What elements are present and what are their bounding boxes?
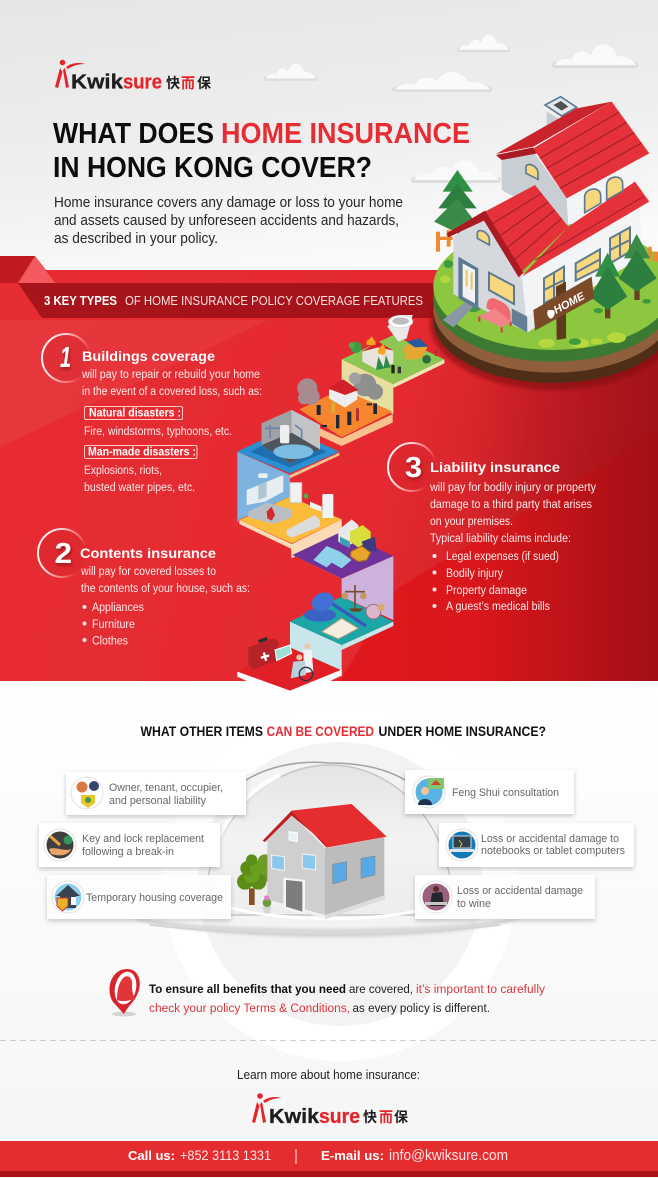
callout text <box>149 982 546 1015</box>
footer logo: sure <box>319 1106 360 1128</box>
card: feng shui <box>405 770 574 814</box>
icon: bell location pin <box>109 969 140 1016</box>
card: wine: to wine <box>457 898 491 910</box>
learn more text: Learn more about home insurance: <box>237 1068 420 1082</box>
footer contact bar <box>0 1141 658 1177</box>
badge 2 <box>38 529 86 577</box>
step: legal scene <box>290 585 393 677</box>
callout text: check your policy Terms & Conditions, <box>149 1001 350 1015</box>
icon: people with shield <box>71 777 103 809</box>
body text 3: on your premises. <box>430 516 513 528</box>
title <box>53 118 470 184</box>
card: key and lock: following a break-in <box>82 846 174 858</box>
step: home contents room <box>239 473 342 558</box>
footer logo: 快 <box>363 1109 377 1125</box>
lower walls <box>453 205 642 333</box>
icon: key in hand <box>44 829 76 861</box>
card: wine: Loss or accidental damage <box>457 885 583 897</box>
island shadow <box>430 257 658 390</box>
section 1: buildings coverage <box>42 334 262 494</box>
body text 2: Furniture <box>92 619 135 631</box>
dome floor <box>126 917 525 938</box>
body text 1: in the event of a covered loss, such as: <box>82 386 262 398</box>
card: notebooks and tablets: Loss or accidental damage to <box>481 833 619 845</box>
icon: house with shield <box>52 881 84 913</box>
island base <box>433 223 658 383</box>
sign: home: HOME <box>552 290 587 317</box>
callout text: as every policy is different. <box>352 1001 490 1015</box>
illustration: isometric house on island <box>430 97 658 390</box>
ribbon heading: OF HOME INSURANCE POLICY COVERAGE FEATURES <box>125 294 423 308</box>
step: natural disaster scene <box>342 315 444 414</box>
small house illustration <box>237 804 387 919</box>
callout text: are covered, <box>349 982 413 996</box>
logo: Kwiksure: Kwik <box>71 72 124 94</box>
tree: back right <box>619 234 657 300</box>
body text 2: will pay for covered losses to <box>80 566 216 578</box>
chimney <box>545 97 577 132</box>
isometric staircase illustration <box>237 315 444 701</box>
badge 3: 3 <box>405 452 422 484</box>
ribbon heading: 3 KEY TYPES <box>44 294 117 308</box>
step: medical scene <box>237 637 342 701</box>
card: feng shui: Feng Shui consultation <box>452 787 559 799</box>
body text 1: busted water pipes, etc. <box>84 482 195 494</box>
badge 1 <box>42 334 90 382</box>
clouds <box>264 35 638 183</box>
door <box>458 257 478 310</box>
logo: Kwiksure: 快 <box>166 75 180 91</box>
panel: red coverage band <box>0 256 658 681</box>
step: man-made disaster scene <box>297 372 393 446</box>
upper roof <box>496 102 649 198</box>
logo: Kwiksure <box>55 60 211 94</box>
flower pot <box>262 895 272 913</box>
wall windows <box>489 227 630 304</box>
footer contact bar: info@kwiksure.com <box>389 1148 508 1164</box>
body text 2: Appliances <box>92 602 144 614</box>
card: temporary housing: Temporary housing coverage <box>86 892 223 904</box>
callout text: it’s important to carefully <box>416 982 546 996</box>
card: key and lock <box>39 823 220 867</box>
fences <box>436 230 658 262</box>
card: wine <box>415 875 595 919</box>
card: key and lock: Key and lock replacement <box>82 833 204 845</box>
ribbon heading <box>18 283 450 318</box>
body text 1 <box>81 369 262 494</box>
tree behind house <box>237 854 277 905</box>
section heading: other items: CAN BE COVERED <box>266 724 374 739</box>
body text 1: Explosions, riots, <box>84 465 162 477</box>
body text 3: Bodily injury <box>446 568 503 580</box>
tag: natural disasters: Natural disasters : <box>89 408 181 420</box>
footer logo: Kwik <box>269 1106 320 1128</box>
footer logo: 而 <box>379 1109 393 1125</box>
step: clothing and belongings <box>290 519 393 620</box>
title: WHAT DOES <box>53 118 214 150</box>
heading 2: Contents insurance <box>80 545 216 561</box>
logo: Kwiksure: 保 <box>197 75 211 91</box>
footer logo <box>252 1093 408 1128</box>
title: IN HONG KONG COVER? <box>53 152 372 184</box>
section heading: other items: UNDER HOME INSURANCE? <box>378 724 546 739</box>
logo: Kwiksure: sure <box>123 72 162 94</box>
windows and door <box>272 832 375 914</box>
callout text: To ensure all benefits that you need <box>149 982 346 996</box>
dome illustration <box>126 762 525 938</box>
body text 3: will pay for bodily injury or property <box>429 482 596 494</box>
tree: front right <box>590 253 627 318</box>
intro text: Home insurance covers any damage or loss to your home <box>54 195 403 211</box>
card: notebooks and tablets <box>439 823 634 867</box>
badge 1: 1 <box>60 342 71 374</box>
heading 1: Buildings coverage <box>82 348 215 364</box>
step: water damage room <box>237 410 339 523</box>
lower roof <box>447 182 649 277</box>
section heading: other items: WHAT OTHER ITEMS <box>140 724 263 739</box>
badge 2: 2 <box>54 538 72 570</box>
body text 3: Typical liability claims include: <box>430 533 571 545</box>
icon: broken laptop <box>446 829 478 861</box>
footer logo: 保 <box>394 1109 408 1125</box>
body text 3: damage to a third party that arises <box>430 499 592 511</box>
sign: home <box>533 277 594 340</box>
arched windows <box>477 165 623 245</box>
glass dome <box>205 765 453 915</box>
section heading: other items <box>140 724 546 739</box>
body text 3: A guest’s medical bills <box>446 601 550 613</box>
footer contact bar: Call us: <box>128 1148 175 1163</box>
icon: person with wine <box>420 881 452 913</box>
logo: Kwiksure: 而 <box>181 75 195 91</box>
roof <box>263 804 387 848</box>
intro text: as described in your policy. <box>54 231 218 247</box>
intro text: and assets caused by unforeseen accidents and hazards, <box>54 213 399 229</box>
body text 2: the contents of your house, such as: <box>81 583 250 595</box>
card: personal liability: Owner, tenant, occupier, <box>109 782 223 794</box>
icon: consultant and house <box>413 776 445 808</box>
card: personal liability <box>66 772 246 815</box>
heading 3: Liability insurance <box>430 459 560 475</box>
body text 3: Legal expenses (if sued) <box>446 551 559 563</box>
intro text <box>54 195 403 247</box>
tag: man-made disasters: Man-made disasters : <box>88 446 196 458</box>
bench <box>479 298 511 333</box>
card: notebooks and tablets: notebooks or tablet computers <box>481 845 625 857</box>
body text 2: Clothes <box>92 636 128 648</box>
upper walls <box>502 152 642 225</box>
body text 1: Fire, windstorms, typhoons, etc. <box>84 426 232 438</box>
footer contact bar: E-mail us: <box>321 1148 384 1163</box>
card: temporary housing <box>47 875 231 919</box>
title: HOME INSURANCE <box>221 118 470 150</box>
badge 3 <box>388 443 436 491</box>
path to door <box>443 299 475 327</box>
section 2: contents insurance <box>38 529 250 648</box>
section 3: liability insurance <box>388 443 596 613</box>
body text 3 <box>429 482 596 613</box>
tree: left <box>434 170 477 233</box>
house walls <box>267 815 326 919</box>
body text 1: will pay to repair or rebuild your home <box>81 369 260 381</box>
footer contact bar: +852 3113 1331 <box>180 1147 271 1163</box>
body text 3: Property damage <box>446 585 527 597</box>
card: personal liability: and personal liability <box>109 795 206 807</box>
body text 2 <box>80 566 250 648</box>
